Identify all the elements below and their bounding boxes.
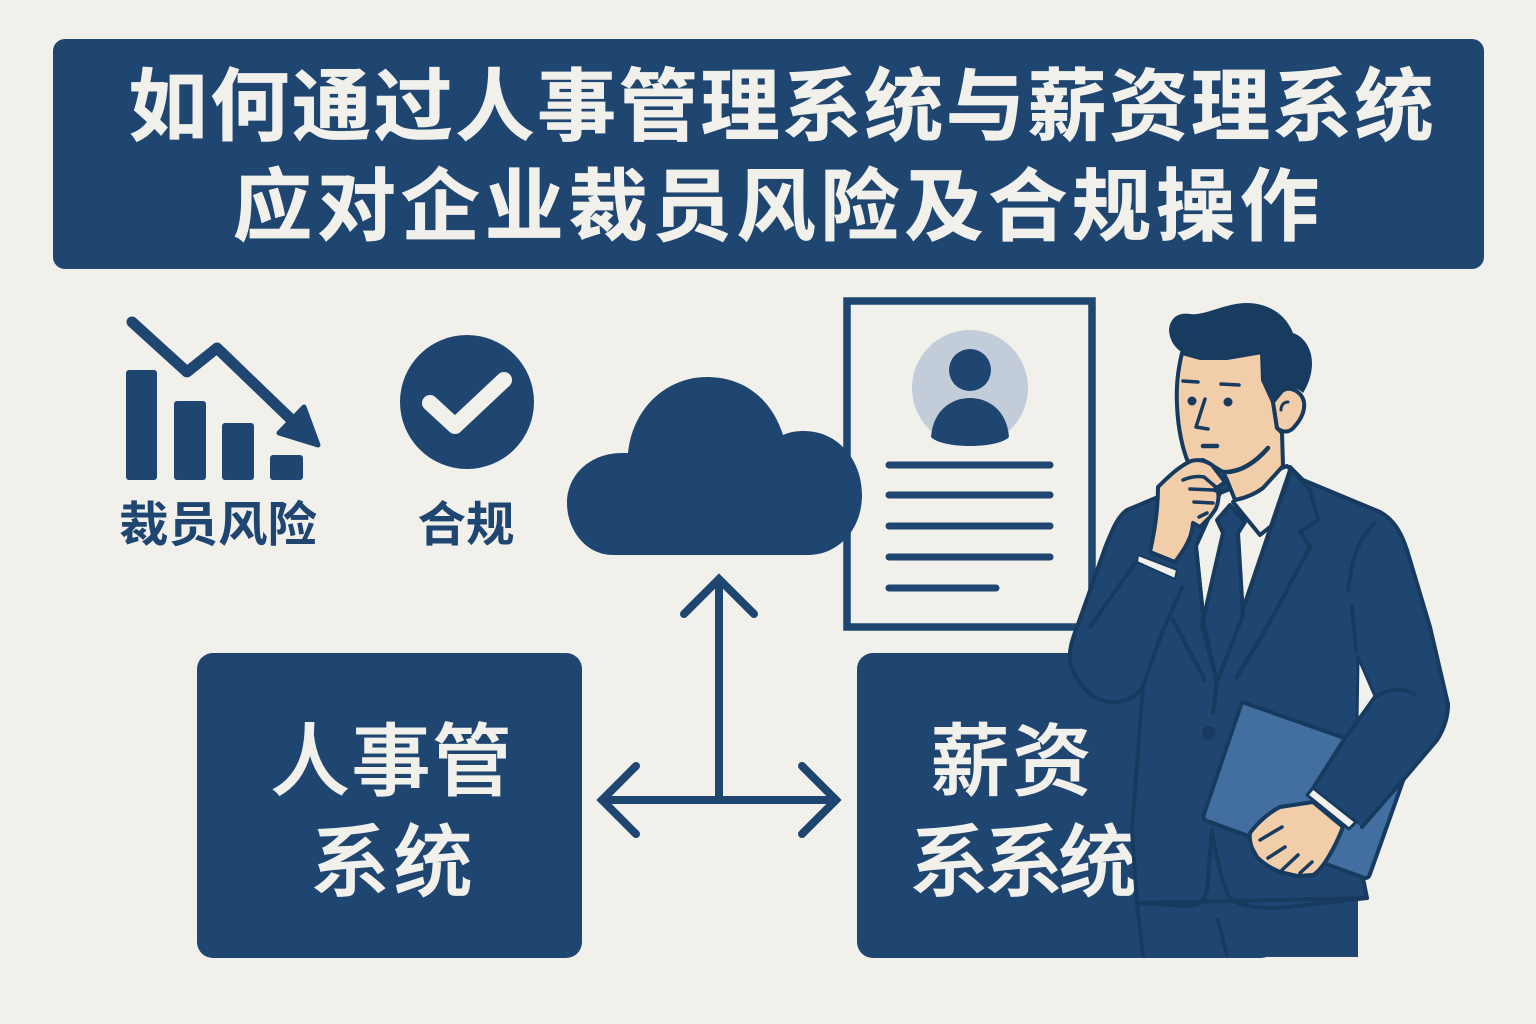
tablet folder <box>1203 702 1410 878</box>
employee profile document <box>847 301 1092 627</box>
shirt <box>1196 466 1291 625</box>
panel: HR system: 系统 <box>310 818 472 907</box>
tie <box>1202 505 1245 682</box>
panel: payroll system: 薪资 <box>930 717 1092 806</box>
collar <box>1233 502 1270 535</box>
connecting arrows <box>602 579 836 834</box>
label: compliance: 合规 <box>418 499 514 552</box>
jaw line <box>1223 448 1268 472</box>
hair <box>1169 303 1312 402</box>
jacket with both arms <box>1070 467 1448 903</box>
lower hand <box>1250 802 1343 876</box>
icon: layoff risk falling bar chart <box>126 322 318 480</box>
neck and face <box>1177 352 1283 500</box>
lapels and seams <box>1090 468 1375 955</box>
icon: cloud <box>567 377 862 555</box>
jacket button <box>1202 726 1216 740</box>
panel: HR system: 人事管 <box>270 717 512 806</box>
hand at chin <box>1150 460 1225 562</box>
facial features <box>1183 381 1239 446</box>
title banner: 应对企业裁员风险及合规操作 <box>233 162 1319 251</box>
panel: HR system <box>197 653 582 958</box>
trousers <box>1137 900 1358 957</box>
title banner <box>53 39 1484 269</box>
businessman illustration <box>1070 303 1448 957</box>
panel: payroll system <box>857 653 1277 958</box>
forearm over tablet <box>1310 690 1448 827</box>
lower cuff <box>1307 788 1356 829</box>
icon: compliance check <box>400 335 534 469</box>
forearm outline <box>1310 690 1448 827</box>
gap between torso and arm <box>1357 657 1375 722</box>
label: layoff risk: 裁员风险 <box>119 499 317 552</box>
title banner: 如何通过人事管理系统与薪资理系统 <box>128 62 1434 151</box>
upper cuff <box>1137 555 1177 579</box>
panel: payroll system: 系系统 <box>910 818 1138 907</box>
ear <box>1273 389 1304 432</box>
